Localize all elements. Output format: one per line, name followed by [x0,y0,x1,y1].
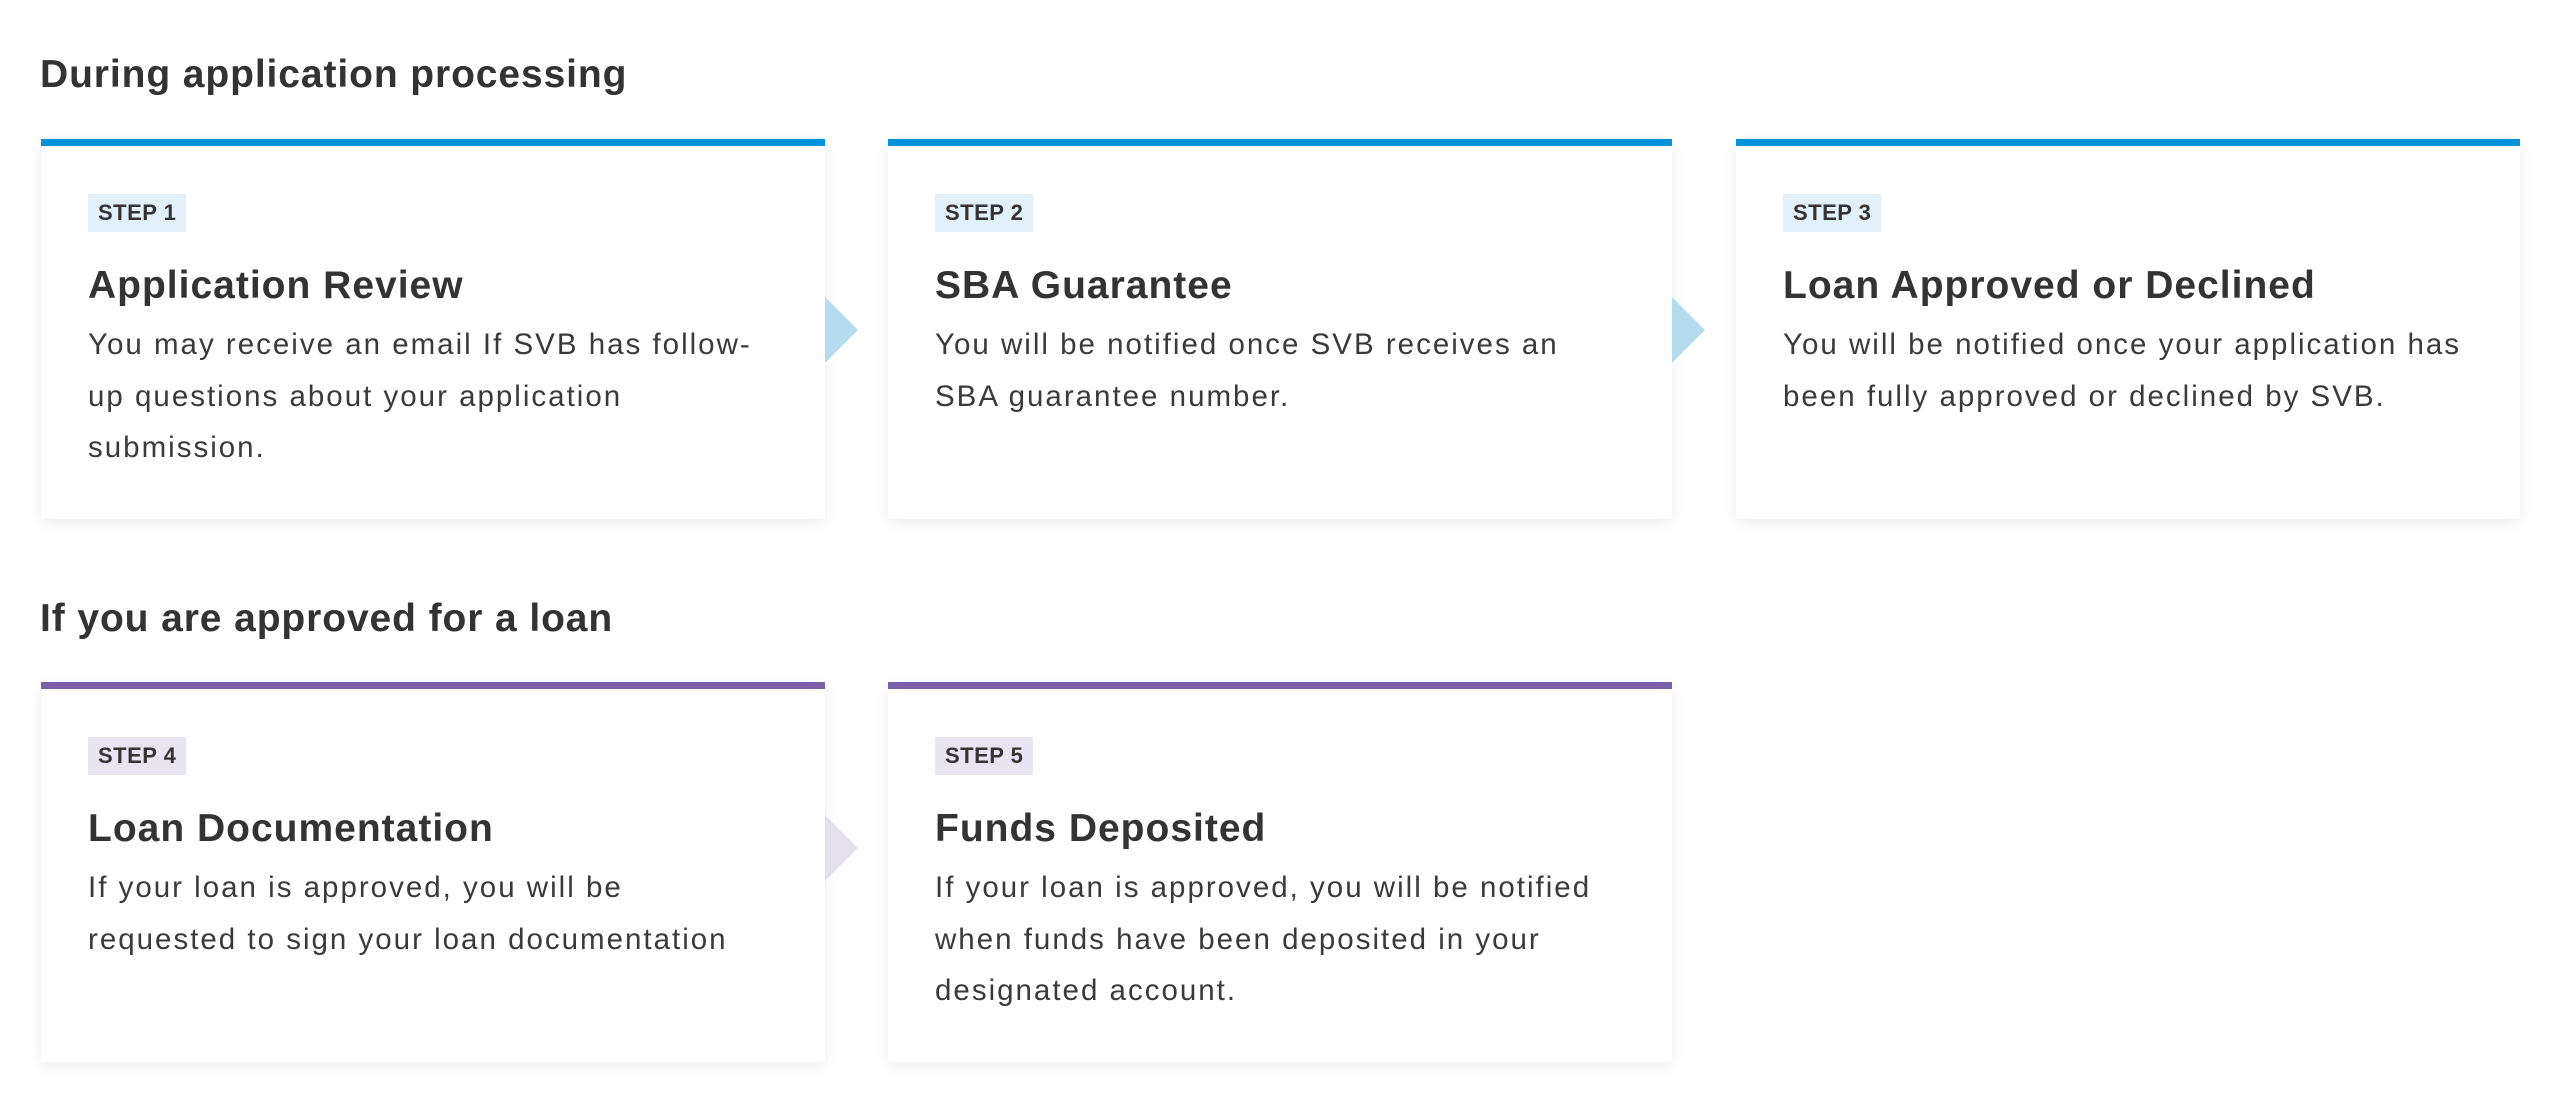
text: step 3 description: been fully approved or declined by SVB. [1783,380,2386,412]
card: step 4 [41,682,825,1062]
badge: step 3 [1783,194,1881,232]
arrow: step 4 to 5 [825,815,858,881]
heading: during application processing: During application processing [40,53,627,96]
text: step 5 description: If your loan is approved, you will be notified [935,871,1591,904]
card: step 5 [888,682,1672,1062]
text: step 5 description: designated account. [935,974,1237,1007]
text: step 2 description [935,328,1559,412]
badge: step 5: STEP 5 [945,743,1023,768]
badge: step 1: STEP 1 [98,200,176,225]
arrow: step 1 to 2 [825,297,858,363]
title: application review: Application Review [88,264,464,307]
badge: step 3: STEP 3 [1793,200,1871,225]
text: step 1 description [88,328,752,464]
title: funds deposited: Funds Deposited [935,807,1266,850]
title: loan approved or declined: Loan Approved or Declined [1783,264,2316,307]
text: step 5 description: when funds have been deposited in your [935,922,1541,956]
badge: step 1 [88,194,186,232]
text: step 1 description: You may receive an email If SVB has follow- [88,328,752,361]
title: SBA guarantee: SBA Guarantee [935,264,1233,307]
badge: step 4: STEP 4 [98,743,176,768]
badge: step 2 [935,194,1033,232]
text: step 4 description: If your loan is approved, you will be [88,871,623,904]
text: step 1 description: submission. [88,431,266,464]
text: step 4 description: requested to sign your loan documentation [88,922,728,956]
arrow: step 2 to 3 [1672,297,1705,363]
text: step 2 description: You will be notified once SVB receives an [935,328,1559,361]
text: step 2 description: SBA guarantee number. [935,380,1290,412]
card: step 3 [1736,139,2520,519]
badge: step 4 [88,737,186,775]
text: step 4 description [88,871,728,956]
text: step 3 description: You will be notified once your application has [1783,328,2461,361]
title: loan documentation: Loan Documentation [88,807,494,850]
card: step 2 [888,139,1672,519]
badge: step 5 [935,737,1033,775]
badge: step 2: STEP 2 [945,200,1023,225]
heading: if you are approved: If you are approved for a loan [40,597,613,640]
text: step 1 description: up questions about your application [88,380,622,412]
text: step 3 description [1783,328,2461,412]
card: step 1 [41,139,825,519]
text: step 5 description [935,871,1591,1007]
